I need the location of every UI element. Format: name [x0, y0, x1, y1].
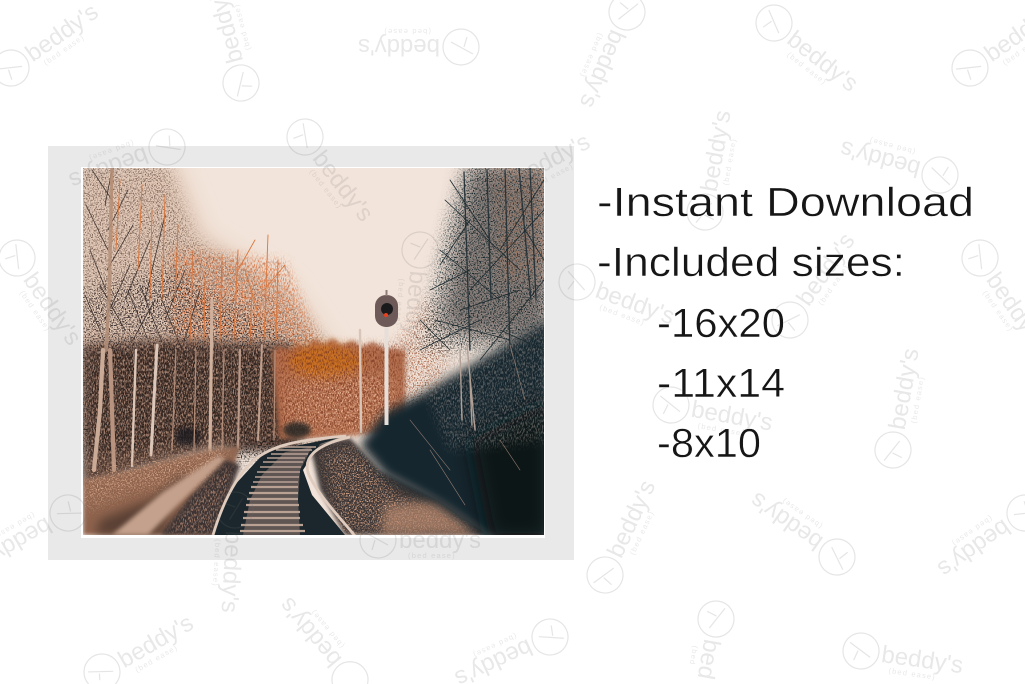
size 16x20: -16x20 — [657, 300, 785, 346]
watermark 1: (bed ease) — [42, 32, 86, 67]
watermark 21: (bed ease) — [408, 551, 456, 560]
watermark 22: beddy's — [602, 476, 661, 562]
watermark 9: (bed ease) — [393, 278, 406, 327]
watermark 3: (bed ease) — [383, 27, 431, 36]
watermark 10: beddy's — [509, 128, 595, 191]
watermark 7: beddy's — [65, 141, 152, 194]
watermark 4 — [580, 0, 646, 106]
watermark 28 — [274, 588, 368, 684]
watermark 25: (bed ease) — [211, 539, 222, 587]
watermark 23: (bed ease) — [780, 496, 824, 531]
left bare branches — [85, 170, 285, 350]
watermark 18: beddy's — [689, 396, 775, 437]
watermark 7: (bed ease) — [87, 138, 135, 163]
watermark 21 — [360, 522, 481, 560]
white mat — [81, 167, 545, 538]
watermark 15: (bed ease) — [598, 303, 646, 327]
watermark 17: beddy's — [791, 228, 861, 311]
signal head — [375, 290, 398, 327]
watermark 8: (bed ease) — [308, 167, 344, 211]
watermark 10: (bed ease) — [529, 161, 575, 192]
watermark 15: beddy's — [592, 277, 678, 330]
tree trunks, left — [94, 168, 361, 470]
watermark 14: (bed ease) — [981, 289, 1016, 333]
watermark 26: (bed ease) — [471, 632, 518, 660]
watermark 10 — [478, 137, 590, 206]
watermark 22: (bed ease) — [628, 509, 656, 556]
watermark 16 — [170, 254, 290, 298]
watermark 28: beddy's — [274, 592, 347, 672]
sky — [83, 168, 544, 535]
photo: railway through autumn forest — [70, 160, 550, 540]
watermark 12: (bed ease) — [868, 136, 916, 157]
watermark 6 — [952, 18, 1025, 86]
watermark 3: beddy's — [358, 33, 440, 60]
watermark 16: beddy's — [168, 257, 252, 291]
watermark 8 — [286, 118, 370, 221]
watermark 19: (bed ease) — [909, 375, 926, 424]
size 11x14: -11x14 — [657, 360, 785, 406]
watermark 11: beddy's — [696, 108, 737, 194]
watermark 1 — [0, 7, 98, 86]
signal pole — [384, 325, 388, 425]
right ground — [310, 438, 490, 535]
watermark 5: (bed ease) — [785, 50, 829, 87]
watermark 21: beddy's — [399, 527, 481, 554]
left ground — [83, 440, 240, 535]
watermark 9: beddy's — [397, 270, 431, 354]
watermark 7 — [70, 128, 186, 186]
watermark 11 — [686, 112, 738, 230]
watermark 9 — [395, 232, 438, 352]
watermark 18 — [652, 386, 772, 435]
instant download line: -Instant Download — [597, 179, 974, 225]
watermark 8: beddy's — [307, 146, 379, 227]
watermark 13 — [0, 240, 78, 345]
watermark 30: beddy's — [880, 641, 965, 679]
watermark 12 — [841, 136, 958, 194]
watermark 3 — [358, 27, 479, 65]
watermark 15 — [558, 264, 674, 326]
watermark 5: beddy's — [782, 26, 863, 97]
watermark 30 — [840, 631, 965, 684]
watermark 17: (bed ease) — [816, 263, 851, 307]
watermark 27: beddy's — [114, 609, 198, 674]
watermark 16: (bed ease) — [195, 253, 244, 266]
watermark 19 — [874, 350, 926, 468]
watermark 24: beddy's — [933, 514, 1015, 583]
watermark 20 — [0, 494, 86, 558]
watermark 24 — [929, 486, 1025, 587]
watermark 30: (bed ease) — [888, 666, 937, 682]
included sizes line: -Included sizes: — [597, 239, 905, 285]
watermark 2 — [210, 0, 260, 102]
left forest mass — [83, 330, 300, 485]
watermark 29: bed — [692, 637, 725, 681]
right rail — [307, 437, 355, 536]
railway ballast — [213, 436, 345, 535]
watermark 27: (bed ease) — [133, 643, 179, 674]
watermark 24: (bed ease) — [950, 514, 994, 549]
watermark 29: (bed — [688, 645, 700, 666]
watermark 12: beddy's — [837, 135, 923, 182]
watermark 28: (bed ease) — [308, 608, 346, 650]
watermark 2: (bed ease) — [231, 3, 253, 51]
watermark 17 — [772, 235, 854, 338]
dark right forest — [360, 165, 550, 540]
left bare tree haze — [70, 160, 335, 450]
watermark 29 — [686, 598, 737, 682]
watermark 23: beddy's — [745, 486, 828, 556]
watermark 14 — [962, 240, 1025, 330]
watermark 22 — [581, 474, 667, 600]
watermark 18: (bed ease) — [697, 421, 746, 438]
product details text block — [597, 179, 974, 466]
watermark 25: beddy's — [216, 530, 247, 614]
watermark 23 — [742, 482, 863, 582]
watermark 25 — [210, 491, 254, 614]
watermark 1: beddy's — [21, 0, 103, 67]
watermark 5 — [756, 4, 856, 91]
watermark 11: (bed ease) — [721, 137, 738, 186]
watermark 26 — [448, 611, 574, 684]
pale branch haze behind signal — [395, 295, 450, 420]
orange distant treeline — [272, 338, 405, 438]
watermark 13: beddy's — [18, 268, 87, 350]
railway sleepers — [240, 447, 316, 535]
watermark 19: beddy's — [884, 346, 925, 432]
left rail — [213, 436, 346, 535]
right tree trunks and branches — [410, 168, 544, 505]
watermark 4: (bed ease) — [578, 32, 605, 79]
watermark 27 — [84, 609, 201, 684]
size 8x10: -8x10 — [657, 420, 761, 466]
grey picture frame — [48, 146, 574, 560]
watermark 4: beddy's — [574, 26, 631, 112]
watermark 13: (bed ease) — [18, 289, 53, 333]
